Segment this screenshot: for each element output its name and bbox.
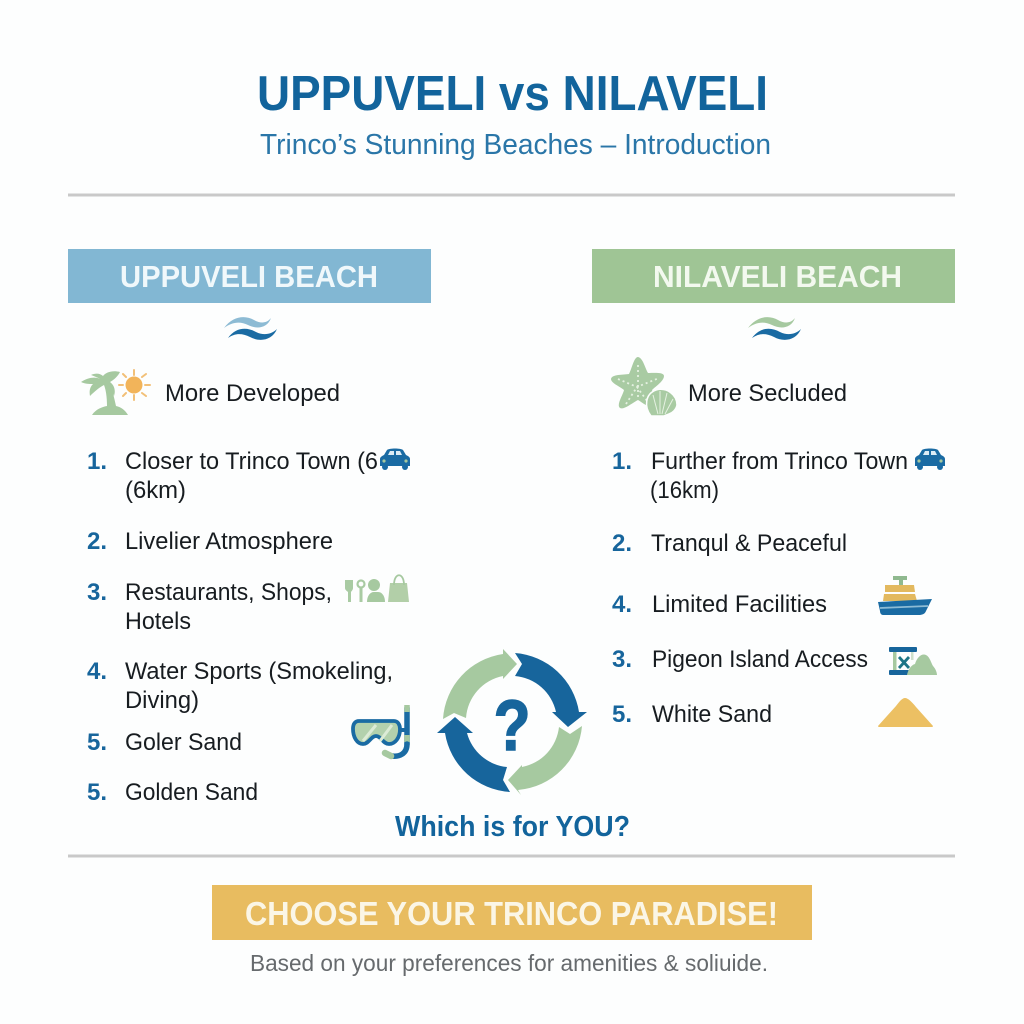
banner: call to action: CHOOSE YOUR TRINCO PARADISE! xyxy=(245,895,778,932)
cycle diagram with question mark xyxy=(437,649,587,795)
list item 4: 4. xyxy=(87,658,107,685)
list item 5: 5. xyxy=(87,729,107,756)
list item 1: 1. xyxy=(87,448,107,475)
list item 4: Diving) xyxy=(125,687,199,714)
label: More Secluded: More Secluded xyxy=(688,380,847,407)
list item 1: (6km) xyxy=(125,477,186,504)
icon: car xyxy=(915,448,945,470)
icon: snorkel mask xyxy=(353,705,407,756)
list item 5: Goler Sand xyxy=(125,729,242,756)
list item 3 xyxy=(87,579,332,635)
icon: dining, people and shopping bag xyxy=(345,575,409,602)
list item 4 xyxy=(87,658,393,714)
list item 2: Livelier Atmosphere xyxy=(125,528,333,555)
icon: waves xyxy=(748,317,801,340)
icon: starfish and shell xyxy=(611,357,677,416)
list item 3: Pigeon Island Access xyxy=(652,646,868,673)
list item 1: 1. xyxy=(612,448,632,475)
heading: Uppuveli Beach xyxy=(68,249,431,303)
list item 2: Tranqul & Peaceful xyxy=(651,530,847,557)
icon: hourglass and island xyxy=(889,647,937,675)
list item 5 repeated: 5. xyxy=(87,779,107,806)
subtitle: Trinco’s Stunning Beaches – Introduction xyxy=(260,129,771,161)
list item 4: 4. xyxy=(612,591,632,618)
panel: Uppuveli Beach xyxy=(68,249,431,806)
arrow: bottom-left blue xyxy=(437,717,510,792)
question mark: ? xyxy=(494,685,530,765)
list item 1: (16km) xyxy=(650,477,719,504)
main title: UPPUVELI vs NILAVELI xyxy=(257,67,768,121)
list item 5: 5. xyxy=(612,701,632,728)
list item 1 xyxy=(87,448,378,504)
list item 2: 2. xyxy=(87,528,107,555)
list item 3: Restaurants, Shops, xyxy=(125,579,332,606)
list item 2: 2. xyxy=(612,530,632,557)
icon: palm tree and sun xyxy=(81,370,150,415)
list item 1: Closer to Trinco Town (6 xyxy=(125,448,378,475)
list item 3: 3. xyxy=(87,579,107,606)
heading: Uppuveli Beach: UPPUVELI BEACH xyxy=(120,259,378,294)
icon: waves xyxy=(224,317,277,340)
label: More Developed: More Developed xyxy=(165,380,340,407)
list item 4: Limited Facilities xyxy=(652,591,827,618)
list item 5 repeated: Golden Sand xyxy=(125,779,258,806)
list item 3: Hotels xyxy=(125,608,191,635)
list item 3: 3. xyxy=(612,646,632,673)
panel: Nilaveli Beach xyxy=(592,249,955,728)
title block xyxy=(257,67,771,161)
heading: Nilaveli Beach xyxy=(592,249,955,303)
list item 1: Further from Trinco Town xyxy=(651,448,908,475)
arrow: bottom-right green xyxy=(508,726,582,795)
arrow: top-right blue xyxy=(515,653,587,727)
list item 5: White Sand xyxy=(652,701,772,728)
icon: boat xyxy=(878,576,932,615)
list item 4: Water Sports (Smokeling, xyxy=(125,658,393,685)
heading: Nilaveli Beach: NILAVELI BEACH xyxy=(653,259,902,294)
arrow: top-left green xyxy=(443,649,517,719)
caption: Which is for YOU?: Which is for YOU? xyxy=(395,811,630,843)
list item 1 xyxy=(612,448,908,504)
footer note: Based on your preferences for amenities & soliuide. xyxy=(250,950,768,976)
banner: call to action xyxy=(212,885,812,940)
icon: sand pile xyxy=(878,698,933,727)
icon: car xyxy=(380,448,410,470)
